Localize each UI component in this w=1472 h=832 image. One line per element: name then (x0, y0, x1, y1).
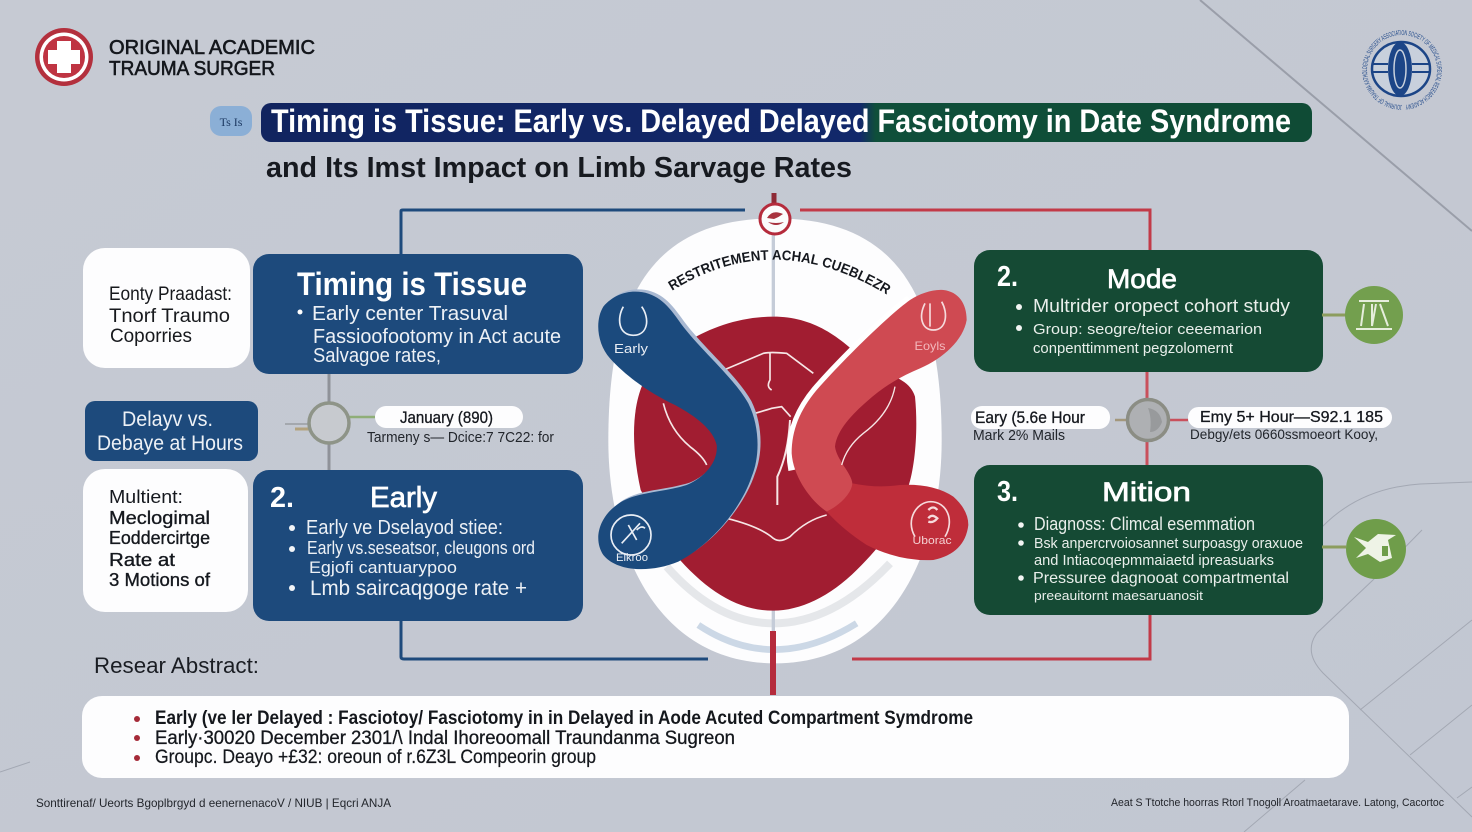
subtitle: and Its Imst Impact on Limb Sarvage Rates (266, 152, 852, 184)
panel: abstract: Early (ve ler Delayed : Fasciotoy/ Fasciotomy in in Delayed in Aode Acuted Compartment Symdrome (155, 708, 973, 729)
date label left (367, 406, 554, 446)
seal: journal emblem: JOURNAL OF TRAUMA KATHOLOGICAL SURGERY ASSOCIATION SOCIETY OF MEDICAL SURGICAL RESEARCH ACADEMY (1362, 30, 1442, 110)
panel: methods note (83, 469, 248, 612)
date label right: early: Mark 2% Mails (973, 427, 1065, 444)
panel: mode: conpenttimment pegzolomernt (1033, 340, 1234, 357)
panel: early: Early ve Dselayod stiee: (306, 517, 503, 539)
panel: abstract: Early·30020 December 2301/\ Indal Ihoreoomall Traundanma Sugreon (155, 728, 735, 749)
title banner: Timing is Tissue: Early vs. Delayed Delayed Fasciotomy in Date Syndrome (271, 103, 1291, 139)
panel: mition: and Intiacoqepmmaiaetd ipreasuarks (1034, 552, 1274, 569)
top centre marker icon (760, 193, 790, 234)
panel: early: Lmb saircaqgoge rate + (310, 577, 527, 600)
panel: methods note: Eoddercirtge (109, 528, 210, 548)
early pathway band (598, 289, 761, 569)
panel: mition: preeauitornt maesaruanosit (1034, 588, 1203, 603)
band labels: Early (614, 341, 649, 356)
panel: abstract (82, 696, 1349, 778)
panel: early: Early vs.seseatsor, cleugons ord (307, 538, 535, 558)
panel: methods note: 3 Motions of (109, 570, 211, 590)
connector lines (329, 210, 1150, 659)
delayed pathway band (792, 290, 968, 560)
panel: mode: Multrider oropect cohort study (1033, 296, 1290, 316)
panel: mode: Group: seogre/teior ceeemarion (1033, 321, 1262, 338)
bottom centre red line (770, 631, 776, 695)
small tag (210, 106, 252, 136)
organisation name (109, 37, 315, 80)
panel: mition: Mition (1102, 477, 1191, 507)
panel: mode: Mode (1107, 264, 1177, 294)
panel: organisation note: Eonty Praadast: (109, 284, 232, 305)
panel: timing is tissue: Salvagoe rates, (313, 345, 441, 367)
panel: early: Early (370, 482, 438, 514)
organisation name: ORIGINAL ACADEMIC (109, 37, 315, 59)
panel: early: 2. (270, 482, 294, 514)
panel: timing is tissue (253, 254, 583, 374)
panel: organisation note: Tnorf Traumo (109, 306, 230, 327)
panel: timing is tissue: Timing is Tissue (297, 266, 527, 302)
panel: timing is tissue: Early center Trasuval (312, 303, 508, 325)
abstract heading: Resear Abstract: (94, 653, 259, 678)
panel: mition: 3. (997, 476, 1018, 508)
panel: mition (974, 465, 1323, 615)
panel: methods note: Multient: (109, 487, 183, 507)
panel: methods note: Meclogimal (109, 508, 210, 528)
panel: early (253, 470, 583, 621)
body shape (634, 317, 916, 611)
icon: columns badge (1322, 286, 1403, 344)
panel: delay label: Delayv vs. (122, 408, 213, 431)
panel: mode (974, 250, 1323, 372)
date label right: early (971, 406, 1110, 444)
nerve lines (663, 352, 827, 540)
date label left: January (890) (400, 408, 493, 427)
timeline node right (1115, 400, 1188, 440)
footer right: Aeat S Ttotche hoorras Rtorl Tnogoll Aroatmaetarave. Latong, Cacortoc (1111, 797, 1444, 809)
band labels: Elkroo (616, 552, 648, 564)
panel: abstract: Groupc. Deayo +£32: oreoun of r.6Z3L Compeorin group (155, 747, 596, 768)
panel: mition: Bsk anpercrvoiosannet surpoasgy oraxuoe (1034, 535, 1303, 552)
band labels (614, 339, 952, 564)
band labels: Uborac (912, 535, 952, 547)
date label right: delayed: Debgy/ets 0660ssmoeort Kooy, (1190, 426, 1378, 442)
band icons (611, 302, 949, 555)
organisation name: TRAUMA SURGER (109, 58, 275, 80)
timeline node left (285, 403, 375, 443)
panel: delay label: Debaye at Hours (97, 432, 243, 455)
footer left: Sonttirenaf/ Ueorts Bgoplbrgyd d eenernenacoV / NIUB | Eqcri ANJA (36, 796, 391, 810)
panel: mition: Diagnoss: Climcal esemmation (1034, 514, 1255, 534)
panel: mition: Pressuree dagnooat compartmental (1033, 570, 1289, 587)
panel: organisation note (83, 248, 250, 368)
date label right: early: Eary (5.6e Hour (975, 408, 1085, 427)
panel: methods note: Rate at (109, 550, 175, 570)
icon: document badge (1322, 519, 1406, 579)
arc label: RESTRITEMENT ACHAL CUEBLEZR (668, 250, 890, 294)
logo: red cross emblem (35, 28, 93, 86)
date label right: delayed (1188, 407, 1392, 442)
central diagram: limb anatomy with early and delayed pathways (598, 218, 968, 663)
band labels: Eoyls (914, 339, 946, 353)
panel: mode: 2. (997, 261, 1018, 293)
panel: organisation note: Coporries (110, 326, 192, 347)
panel: delay label (85, 401, 258, 461)
small tag: Ts Is (220, 115, 243, 129)
panel: timing is tissue: Fassioofootomy in Act acute (313, 326, 561, 348)
date label right: delayed: Emy 5+ Hour—S92.1 185 (1200, 409, 1383, 426)
panel: early: Egjofi cantuarypoo (309, 558, 457, 577)
date label left: Tarmeny s— Dcice:7 7C22: for (367, 429, 554, 446)
